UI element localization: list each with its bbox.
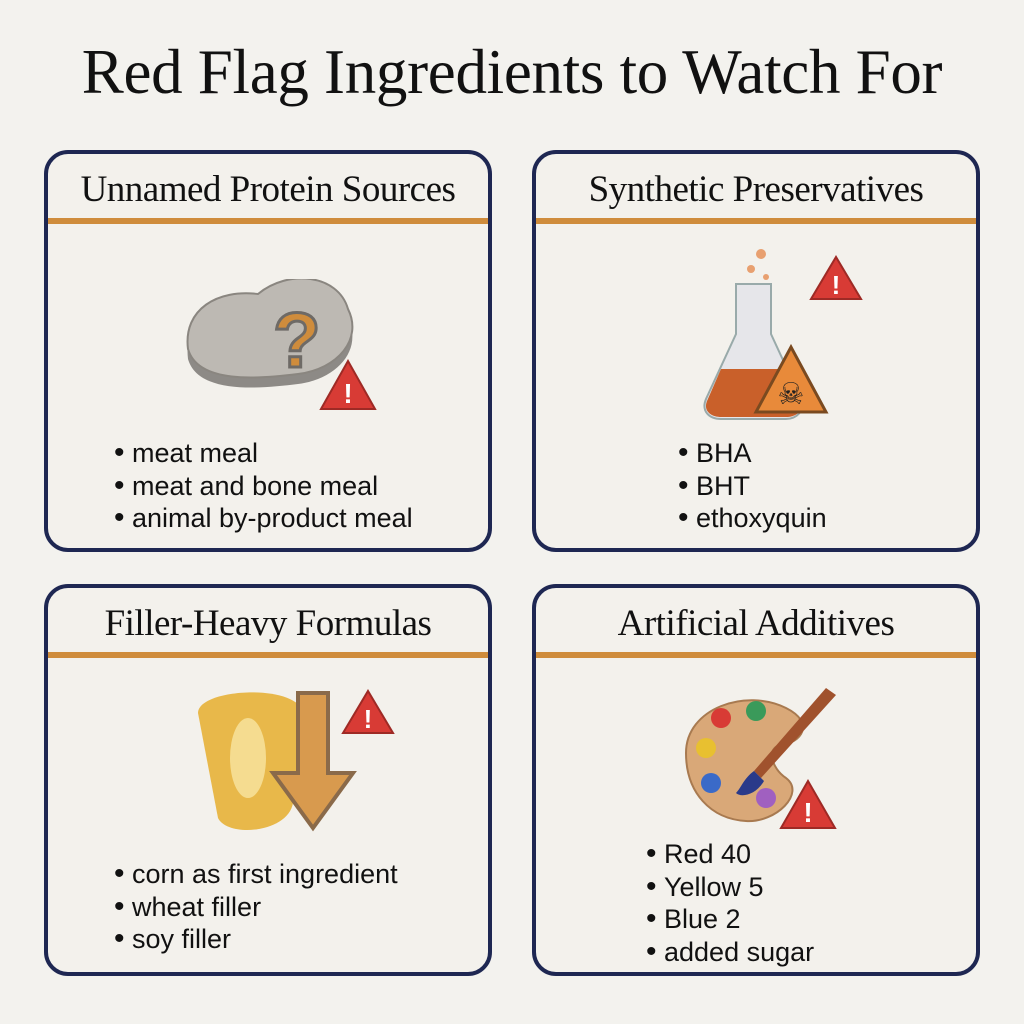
icon: flask with hazard: [703, 249, 863, 420]
bullet list: animal by-product meal: [132, 503, 413, 533]
bullet list: BHA: [696, 438, 752, 468]
icon: corn kernel with down arrow: !: [364, 704, 372, 734]
bullet list: added sugar: [664, 936, 814, 966]
panel: unnamed protein sources: [44, 150, 492, 552]
bullet list: corn as first ingredient: [132, 859, 398, 889]
bullet list: wheat filler: [132, 892, 261, 922]
icon: flask with hazard: !: [832, 270, 840, 300]
bullet list: ethoxyquin: [696, 503, 827, 533]
heading: Filler-Heavy Formulas: [105, 603, 431, 644]
bullet list: Red 40: [664, 839, 751, 869]
bullet list: meat and bone meal: [132, 470, 378, 500]
title: Red Flag Ingredients to Watch For: [82, 37, 942, 107]
icon: corn kernel with down arrow: [198, 689, 395, 832]
icon: flask with hazard: ☠: [778, 378, 804, 411]
icon: paint palette with brush: [685, 688, 837, 829]
panel: artificial additives: [532, 584, 980, 976]
bullet list: [115, 438, 413, 533]
bullet list: [115, 859, 398, 954]
bullet list: [679, 438, 827, 533]
icon: meat with question mark: [186, 279, 377, 410]
icon: meat with question mark: ?: [273, 296, 321, 384]
panel: filler-heavy formulas: [44, 584, 492, 976]
panel: synthetic preservatives: [532, 150, 980, 552]
bullet list: soy filler: [132, 924, 231, 954]
icon: meat with question mark: !: [343, 378, 353, 409]
heading: Synthetic Preservatives: [589, 169, 923, 210]
bullet list: [647, 839, 814, 966]
heading: Artificial Additives: [618, 603, 894, 644]
bullet list: meat meal: [132, 438, 258, 468]
bullet list: Yellow 5: [664, 872, 764, 902]
bullet list: Blue 2: [664, 904, 741, 934]
icon: paint palette with brush: !: [803, 797, 813, 828]
bullet list: BHT: [696, 470, 750, 500]
heading: Unnamed Protein Sources: [81, 169, 455, 210]
